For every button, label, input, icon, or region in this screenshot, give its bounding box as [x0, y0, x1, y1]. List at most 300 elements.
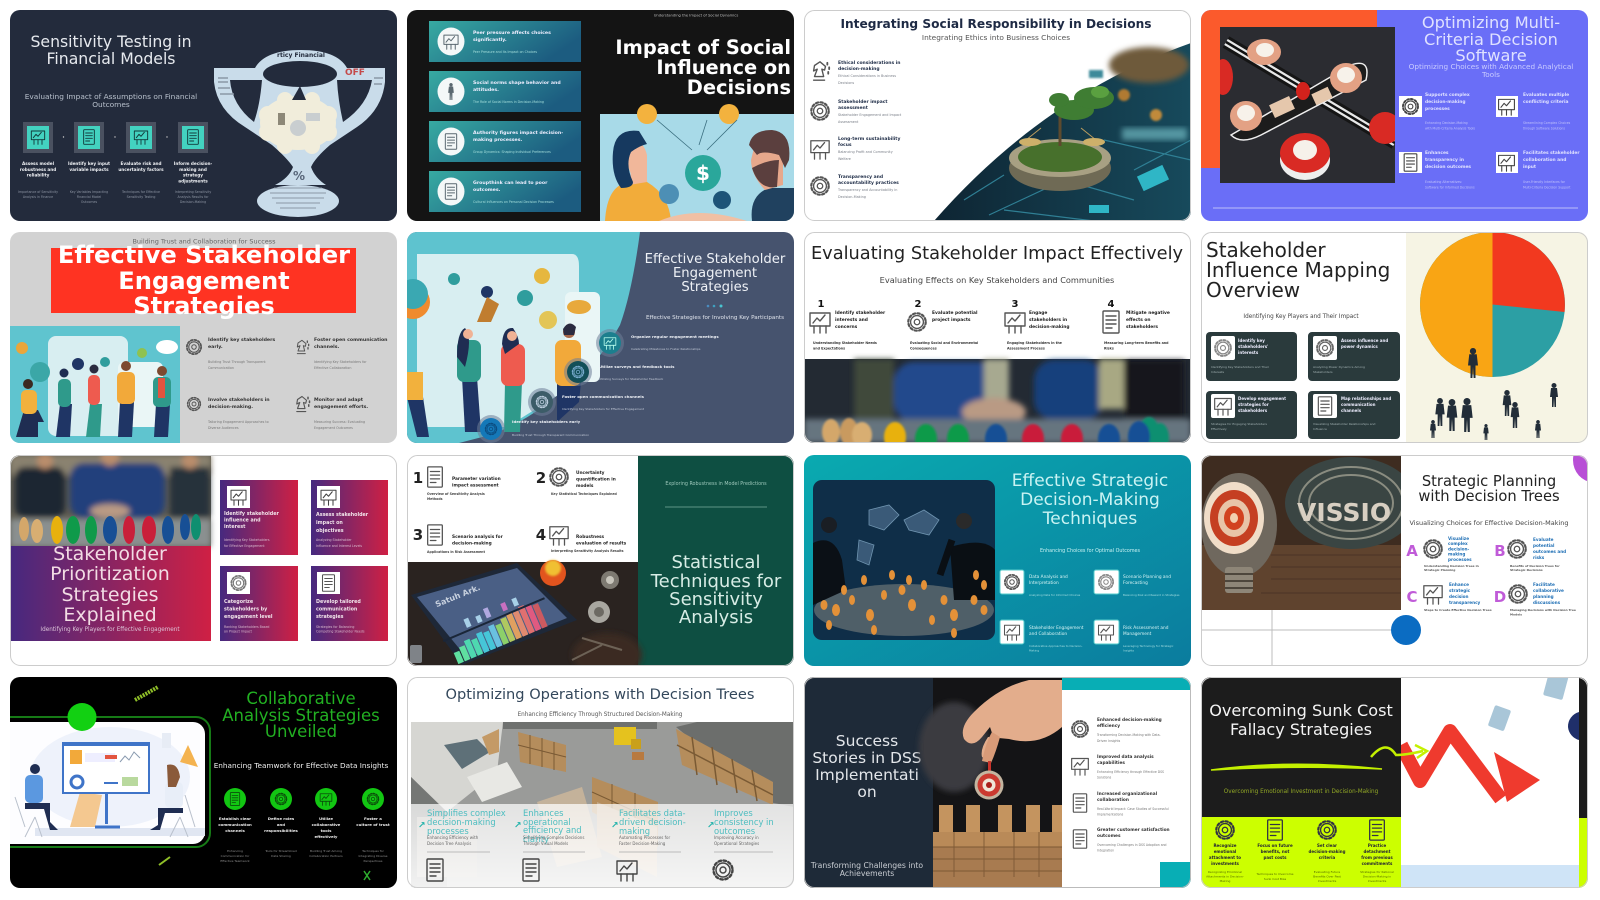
step 3: 3 [1012, 299, 1019, 310]
item D: collaborative [1533, 588, 1564, 593]
item: decision criteria: criteria [1319, 855, 1335, 860]
item descriptions: Decision-Making [180, 200, 206, 204]
step 3: surveys [564, 358, 675, 386]
panel: Optimizing Operations with Decision Trees [407, 677, 794, 888]
illustration: blurred meeting with pawns [10, 448, 211, 547]
column 1: processes [427, 826, 469, 836]
item: recognize attachment: Recognizing Emotional [1208, 870, 1242, 874]
item: data analysis: Interpretation [1029, 580, 1059, 586]
step 4: meetings: Organize regular engagement meetings [631, 334, 719, 339]
step 1: concerns [835, 324, 858, 330]
title banner [51, 241, 356, 320]
item D: Models [1510, 612, 1522, 616]
step 3: Engage [1029, 310, 1047, 316]
illustration: light bulb and vision sign [1201, 455, 1417, 610]
item: ethical considerations: Decisions [838, 81, 854, 85]
item: complex decisions: with Multi-Criteria Analysis Tools [1425, 126, 1475, 130]
decorative dots [707, 304, 722, 308]
item labels: variable impacts [69, 167, 109, 172]
title: Techniques [1042, 509, 1137, 529]
item: future benefits: Focus on future [1257, 843, 1293, 848]
subtitle: Outcomes [92, 100, 130, 109]
item: involve stakeholders: Involve stakeholders in [208, 397, 270, 403]
item C: Enhance [1449, 582, 1469, 587]
illustration: trophy: % [293, 169, 305, 183]
item: communication channels: Establish clear [219, 816, 251, 821]
title: Collaborative [246, 689, 356, 708]
item descriptions: Outcomes [81, 200, 97, 204]
subtitle: Identifying Key Players and Their Impact [1243, 314, 1359, 320]
step 1: and Expectations [813, 346, 845, 350]
tile: peer pressure: significantly. [473, 37, 507, 43]
item: roles: responsibilities [264, 828, 299, 833]
subtitle: Effective Strategies for Involving Key Participants [646, 315, 784, 321]
step 4: Mitigate negative [1126, 310, 1170, 316]
step 2 [908, 299, 978, 350]
item: foster communication: Effective Collaboration [314, 366, 351, 370]
brush stroke and arrow [1211, 745, 1427, 770]
panel: Impact of Social Influence on Decisions [407, 10, 794, 221]
item descriptions: Techniques for Effective [121, 190, 160, 194]
item: decision criteria: Evaluating Future [1314, 870, 1340, 874]
tile: identify interests: stakeholders' [1238, 344, 1268, 349]
tile: impact on objectives: Influence and Interest Levels [316, 544, 362, 548]
item 1: Overview of Sensitivity Analysis [427, 492, 485, 496]
tile: engagement strategies: stakeholders [1238, 408, 1268, 413]
item: organizational collaboration: Increased organizational [1097, 791, 1158, 797]
item: data analysis: Analyzing Data for Informed Choices [1029, 593, 1081, 597]
title banner: Engagement [118, 267, 290, 295]
item: long-term sustainability: Balancing Profit and Community [838, 150, 893, 154]
column 1: Decision Tree Analysis [427, 841, 471, 846]
subtitle: Tools [1481, 70, 1500, 79]
column 4: outcomes [714, 826, 755, 836]
step 2: project impacts [932, 317, 971, 323]
tile: tailored communication: strategies [316, 614, 344, 620]
tile: categorize: stakeholders by [224, 606, 268, 612]
item: tools: tools [321, 828, 332, 833]
illustration: trophy: OFF [345, 68, 365, 78]
title: Influence on [656, 56, 791, 79]
item A: complex [1448, 541, 1468, 546]
item: identify early: Identify key stakeholders [208, 337, 275, 343]
step 1 [810, 299, 886, 350]
item: foster communication: Identifying Key Stakeholders for [314, 360, 367, 364]
item 4 [536, 526, 627, 553]
tile: assess influence [1308, 332, 1400, 381]
item: roles: Data Sharing [271, 854, 291, 858]
item: identify early: Communication [208, 366, 234, 370]
item labels: making and [179, 167, 207, 172]
item: transparency: Decision-Making [838, 195, 866, 199]
green circle accent [68, 703, 96, 731]
panel: Effective Stakeholder Engagement Strategies (grey) [10, 232, 397, 443]
item labels: strategy [183, 173, 203, 178]
item: communication channels [218, 788, 252, 863]
item: involve stakeholders: Tailoring Engagement Approaches to [207, 420, 269, 424]
item: future benefits: benefits, not [1261, 849, 1289, 854]
item 3: Scenario analysis for [452, 534, 504, 540]
tile: categorize: engagement level [224, 614, 273, 620]
accent squiggles [135, 687, 370, 880]
tile: assess influence: Analyzing Power Dynamics Among [1313, 365, 1365, 369]
item: collaboration: Multi-Criteria Decision Support [1523, 186, 1571, 190]
item: customer satisfaction [1073, 827, 1170, 852]
item: decision criteria: decision-making [1309, 849, 1346, 854]
item: ethical considerations: decision-making [838, 66, 880, 72]
item B: Strategic Decisions [1510, 568, 1543, 572]
tile: map relationships: Map relationships and [1341, 396, 1391, 401]
item: transparency: Evaluating Alternatives: [1425, 180, 1462, 184]
item: transparency: Enhances [1425, 150, 1449, 156]
tile: groupthink: Cultural Influences on Personal Decision Processes [473, 200, 554, 204]
side panel: Statistical [672, 552, 760, 573]
title block: Identifying Key Players for Effective Engagement [40, 627, 180, 633]
title: Overview [1206, 278, 1300, 302]
tile: influence and interest: for Effective Engagement [224, 544, 265, 548]
item: tools: Building Trust Among [310, 849, 342, 853]
side panel: Techniques for [650, 571, 782, 592]
item: stakeholder impact: Stakeholder Engagement and Impact [838, 113, 902, 117]
item 3: 3 [413, 526, 423, 544]
item D: Managing Decisions with Decision Tree [1510, 608, 1576, 612]
tile: map relationships: Visualizing Stakeholder Relationships and [1313, 422, 1376, 426]
column 1: ↗ [418, 821, 426, 831]
item labels: reliability [27, 173, 50, 178]
item labels: adjustments [178, 178, 208, 183]
item: decision-making efficiency: Transforming Decision-Making with Data- [1096, 733, 1161, 737]
title banner: Strategies [133, 292, 275, 320]
item descriptions: Financial Model [77, 195, 101, 199]
item: conflicting criteria: through Software Solutions [1523, 126, 1565, 130]
item: collaboration: User-Friendly Interfaces for [1523, 180, 1566, 184]
title: Stakeholder [1206, 238, 1326, 262]
item: practice detachment: Practice [1368, 843, 1386, 848]
tile: tailored communication: Competing Stakeholder Needs [316, 630, 365, 634]
item C: strategic [1449, 588, 1471, 593]
item descriptions: Sensitivity Testing [127, 195, 155, 199]
item: ethical considerations: Ethical Considerations in Business [838, 74, 896, 78]
illustration: executives over glowing map [813, 480, 995, 640]
subtitle: Enhancing Choices for Optimal Outcomes [1040, 548, 1140, 554]
item B: Benefits of Decision Trees for [1510, 564, 1560, 568]
column 2 [514, 808, 585, 881]
tile: authority figures [429, 121, 581, 162]
tile: engagement strategies [1206, 391, 1297, 439]
item: decision-making efficiency: Driven Insights [1097, 739, 1121, 743]
step 4: stakeholders [1126, 324, 1158, 330]
item: roles: Tools for Streamlined [264, 849, 297, 853]
item: future benefits [1256, 820, 1294, 881]
step 2: 2 [915, 299, 922, 310]
title: Impact of Social [615, 36, 791, 59]
title block: Explained [63, 604, 157, 626]
item: stakeholder engagement: and Collaboration [1029, 631, 1067, 637]
item: risk assessment: Management [1123, 631, 1152, 637]
tile: tailored communication: Strategies for Balancing [316, 625, 354, 629]
step 4: Measuring Long-term Benefits and [1104, 341, 1169, 345]
item: customer satisfaction: outcomes [1097, 833, 1121, 839]
tile: social norms: Social norms shape behavior and [473, 80, 561, 86]
panel: Sensitivity Testing in Financial Models [10, 10, 397, 221]
item: transparency: accountability practices [838, 180, 899, 186]
item: tools: Utilize [319, 816, 333, 821]
item: recognize attachment: attachment to [1209, 855, 1241, 860]
column 3 [611, 808, 686, 881]
tile: peer pressure: Peer Pressure and Its Impact on Choices [473, 50, 537, 54]
item labels: Identify key input [68, 161, 110, 166]
item descriptions: Importance of Sensitivity [18, 190, 58, 194]
item: scenario planning: Balancing Risk and Reward in Strategies [1123, 593, 1180, 597]
tile: map relationships [1308, 391, 1400, 439]
item D: Facilitate [1533, 582, 1555, 587]
item C: Steps to Create Effective Decision Trees [1424, 608, 1492, 612]
title: Evaluating Stakeholder Impact Effectively [811, 243, 1183, 264]
title: Unveiled [265, 722, 337, 741]
illustration: pie chart with silhouettes [1406, 232, 1588, 443]
item: stakeholder impact: Stakeholder impact [838, 99, 888, 105]
title banner: Effective Stakeholder [58, 241, 350, 269]
item: identify early: early. [208, 344, 223, 350]
step 4 [1103, 299, 1170, 350]
item descriptions: Interpreting Sensitivity [175, 190, 211, 194]
item: collaboration: Facilitates stakeholder [1523, 150, 1580, 156]
item descriptions: Key Variables Impacting [70, 190, 108, 194]
tile: engagement strategies: Effectively [1211, 427, 1227, 431]
item: long-term sustainability [811, 136, 900, 161]
title block [10, 543, 211, 641]
item: involve stakeholders [188, 397, 270, 430]
tile: impact on objectives: objectives [316, 528, 344, 534]
item: future benefits: Sunk Cost Bias [1264, 877, 1287, 881]
tile: impact on objectives: Assess stakeholder [316, 512, 369, 518]
left title block: Success [836, 732, 898, 750]
column 3: making [619, 826, 650, 836]
step 1: identify: Identify key stakeholders early [512, 419, 581, 424]
item 2: quantification in [576, 476, 616, 482]
column 4: Improving Accuracy in [714, 835, 759, 840]
item: collaboration: collaboration and [1523, 157, 1566, 163]
item: involve stakeholders: decision-making. [208, 404, 253, 410]
item: involve stakeholders: Diverse Audiences [208, 426, 239, 430]
item 1: impact assessment [452, 482, 499, 488]
item: transparency: Transparency and [838, 174, 883, 180]
item: decision criteria: Investments [1318, 879, 1337, 883]
tile: authority figures: Authority figures impact decision- [473, 130, 563, 136]
panel: Effective Strategic Decision-Making Techniques [804, 455, 1191, 666]
side panel: Analysis [679, 607, 753, 628]
step 2: Evaluating Social and Environmental [910, 341, 978, 345]
item: decision criteria: Benefits Over Past [1313, 875, 1342, 879]
tile: engagement strategies: Develop engagement [1238, 396, 1286, 401]
item descriptions: Analysis in Finance [23, 195, 53, 199]
panel: Optimizing Multi-Criteria Decision Software [1201, 10, 1588, 221]
item: foster communication: Foster open communication [314, 337, 388, 343]
tile: engagement strategies: Strategies for Engaging Stakeholders [1211, 422, 1267, 426]
top caption: Understanding the Impact of Social Dynamics [654, 14, 738, 18]
subtitle: Enhancing Efficiency Through Structured Decision-Making [518, 712, 683, 718]
tile: engagement strategies: strategies for [1238, 402, 1269, 407]
item: foster communication: channels. [314, 344, 340, 350]
item: communication channels: Communication for [221, 854, 250, 858]
item: data analysis capabilities [1072, 754, 1164, 780]
item: risk assessment: Leveraging Technology for Strategic [1123, 644, 1174, 648]
item: risk assessment [1094, 620, 1174, 652]
item: conflicting criteria [1496, 92, 1571, 130]
item 3: Applications in Risk Assessment [427, 550, 485, 554]
item A: Strategic Planning [1424, 568, 1455, 572]
item A: A [1406, 542, 1418, 560]
item: ethical considerations [814, 60, 900, 85]
item: practice detachment: from previous [1361, 855, 1393, 860]
top bar [1062, 677, 1191, 690]
step 2: Consequences [910, 346, 937, 350]
item: transparency [811, 174, 899, 199]
illustration: X-shaped track with buttons [1213, 27, 1401, 183]
step 4: 4 [1108, 299, 1115, 310]
title: Strategies [681, 280, 749, 295]
column 2: Through Visual Models [522, 841, 568, 846]
item: organizational collaboration: Implementations [1097, 812, 1124, 816]
item: monitor and adapt: Measuring Success: Evaluating [314, 420, 365, 424]
step 1: Understanding Stakeholder Needs [813, 341, 877, 345]
item 4: Interpreting Sensitivity Analysis Results [551, 549, 624, 553]
item: stakeholder engagement: Making [1029, 648, 1039, 652]
item: complex decisions: Supports complex [1425, 92, 1470, 98]
item: practice detachment: commitments [1362, 861, 1393, 866]
item: decision criteria [1309, 821, 1346, 883]
tile: impact on objectives: Analyzing Stakeholder [316, 538, 352, 542]
item: complex decisions [1399, 92, 1475, 130]
column 4: ↗ [707, 821, 715, 831]
column 2: clarity [523, 834, 549, 844]
item: tools: Collaboration Partners [309, 854, 343, 858]
left title block: on [857, 783, 877, 801]
subtitle: Integrating Ethics into Business Choices [922, 33, 1070, 42]
tile: identify interests: Identifying Key Stakeholders and Their [1211, 365, 1270, 369]
item: data analysis [1000, 570, 1081, 597]
item: collaboration [1496, 150, 1580, 190]
item: transparency [1399, 150, 1475, 190]
item C: decision [1449, 594, 1469, 599]
item: organizational collaboration [1073, 791, 1169, 816]
item: practice detachment: detachment [1363, 849, 1391, 854]
left title block: Transforming Challenges into [810, 861, 923, 870]
item B: potential [1533, 543, 1555, 548]
title: Strategic Planning [1422, 473, 1556, 490]
item: long-term sustainability: Long-term sustainability [838, 136, 900, 142]
item: data analysis capabilities: capabilities [1097, 760, 1125, 766]
corner block [1160, 862, 1191, 888]
column 3: ↗ [611, 821, 619, 831]
item: data analysis capabilities: Enhancing Efficiency through Effective DSS [1097, 770, 1164, 774]
item 4: Robustness [576, 534, 605, 540]
panel: Statistical Techniques for Sensitivity Analysis [407, 455, 794, 677]
step 1: Identify stakeholder [835, 310, 886, 316]
item: communication channels: communication [218, 822, 252, 827]
item: scenario planning: Forecasting [1123, 580, 1148, 586]
item B: outcomes and [1533, 549, 1566, 554]
title: Sensitivity Testing in [30, 32, 192, 51]
column 4 [707, 808, 774, 880]
panel: Collaborative Analysis Strategies Unveiled [0, 677, 397, 888]
illustration: two people and coin [600, 104, 794, 221]
item 1: Parameter variation [452, 476, 501, 482]
item: ethical considerations: Ethical considerations in [838, 60, 900, 66]
tile: influence and interest: Identify stakeholder [224, 511, 279, 517]
tile: map relationships: Influence [1313, 427, 1327, 431]
step 3: surveys: Utilizing Surveys for Stakeholder Feedback [599, 377, 664, 381]
item: complex decisions: decision-making [1425, 99, 1466, 105]
column 4: Operational Strategies [714, 841, 759, 846]
item: complex decisions: processes [1425, 106, 1450, 112]
item: scenario planning: Scenario Planning and [1123, 574, 1171, 580]
tile: identify interests [1206, 332, 1297, 381]
title block: Stakeholder [53, 543, 167, 565]
item: recognize attachment: investments [1211, 861, 1240, 866]
item 3: decision-making [452, 540, 492, 546]
tile: groupthink [429, 171, 581, 212]
subtitle: Visualizing Choices for Effective Decision-Making [1409, 519, 1569, 527]
item: practice detachment: Decision-Making in [1363, 875, 1391, 879]
item B: Evaluate [1533, 537, 1554, 542]
subtitle: Evaluating Impact of Assumptions on Financial [25, 92, 197, 101]
item: practice detachment: Investments [1368, 879, 1387, 883]
tile: authority figures: Group Dynamics: Shaping Individual Preferences [473, 150, 551, 154]
item: stakeholder impact: Assessment [838, 120, 859, 124]
illustration: trophy [214, 50, 385, 217]
step 4: Risks [1104, 346, 1114, 350]
item: communication channels: Effective Teamwork [220, 859, 250, 863]
step 3: Engaging Stakeholders in the [1007, 341, 1063, 345]
dark title block: Overcoming Sunk Cost [1209, 701, 1393, 720]
panel: Stakeholder Prioritization Strategies Explained [10, 448, 397, 666]
item 2: Key Statistical Techniques Explained [551, 492, 618, 496]
title: Optimizing Multi- [1422, 13, 1560, 32]
step 3: stakeholders in [1029, 317, 1067, 323]
dark title block [1201, 677, 1401, 817]
column 3: Automating Processes for [619, 835, 671, 840]
step 1: identify: Building Trust Through Transparent Communication [512, 433, 589, 437]
title: Effective Strategic [1012, 471, 1168, 491]
tile: groupthink: outcomes. [473, 187, 501, 193]
item A: Visualize [1448, 536, 1469, 541]
item: stakeholder engagement: Stakeholder Engagement [1029, 625, 1084, 631]
item 4: 4 [536, 526, 546, 544]
item 1: 1 [413, 469, 423, 487]
step 2: communication [528, 388, 645, 416]
subtitle: Overcoming Emotional Investment in Decision-Making [1224, 789, 1379, 795]
step 2: Evaluate potential [932, 310, 978, 316]
tile: categorize: Ranking Stakeholders Based [224, 625, 269, 629]
item labels: uncertainty factors [118, 167, 164, 172]
item: practice detachment [1360, 820, 1394, 883]
left title block: Achievements [840, 869, 894, 878]
tile: map relationships: communication [1341, 402, 1376, 407]
tile: influence and interest: Identifying Key Stakeholders [224, 538, 270, 542]
item: tools [309, 788, 343, 858]
illustration: trophy: rticy Financial [277, 52, 325, 59]
item 1 [413, 467, 501, 501]
illustration: hand placing target on blocks [919, 677, 1062, 888]
illustration: team meeting [10, 326, 180, 443]
step 4: meetings [596, 329, 719, 357]
title: Decision-Making [1020, 490, 1160, 510]
item: stakeholder impact: assessment [838, 105, 869, 111]
item: data analysis capabilities: Solutions [1097, 776, 1112, 780]
item: monitor and adapt: engagement efforts. [314, 404, 368, 410]
step 1: identify [477, 415, 589, 443]
